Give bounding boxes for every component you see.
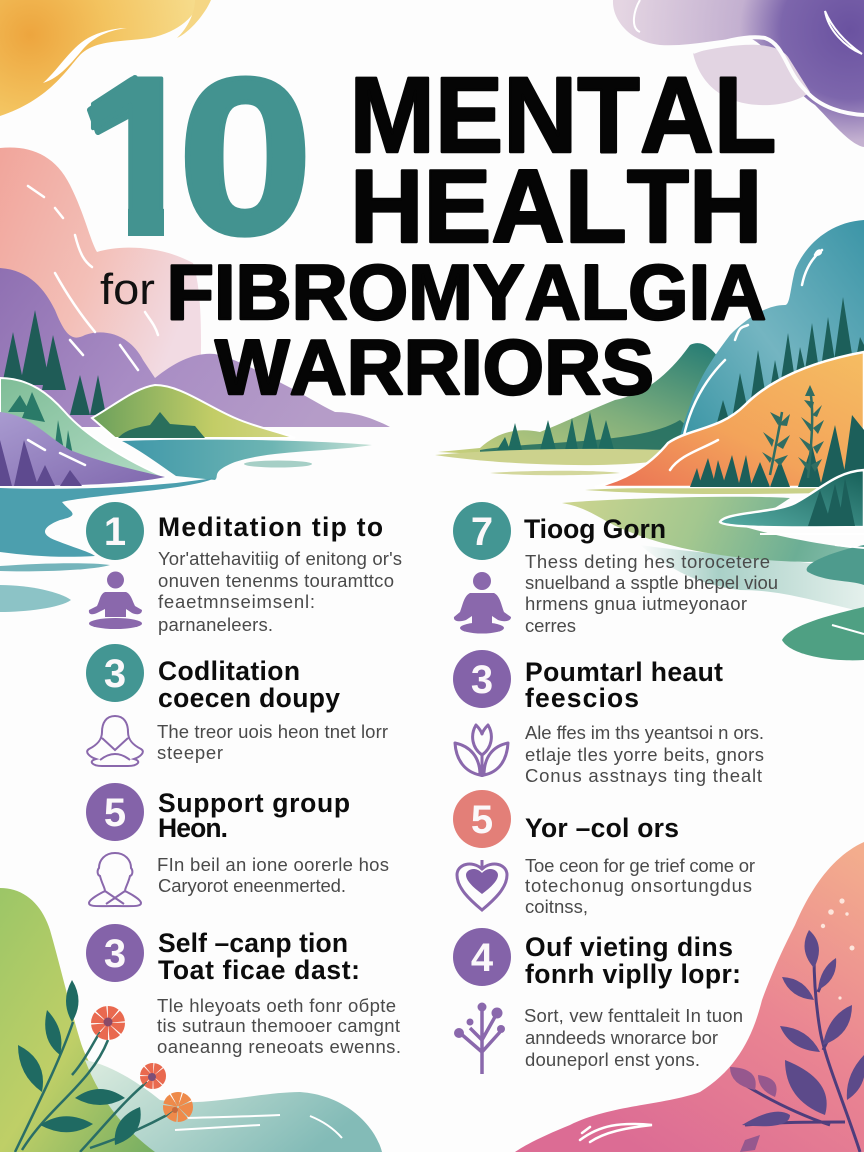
heading xyxy=(525,932,741,989)
lavender hill xyxy=(0,412,165,486)
body: steeper xyxy=(157,742,223,763)
back green hills xyxy=(438,343,720,455)
green water at right edge xyxy=(782,607,864,660)
number badge 1 xyxy=(86,502,144,560)
icon: leaf sprig xyxy=(455,725,508,777)
highlight strokes xyxy=(28,186,158,465)
number badge 5: 5 xyxy=(104,791,126,835)
body: snuelband a ssptle bhepel viou xyxy=(525,572,778,593)
number badge 7: 7 xyxy=(471,510,493,554)
big number 10: 0 xyxy=(178,33,313,281)
body: Tle hleyoats oeth fonr oбpte xyxy=(157,995,396,1016)
number badge 4 xyxy=(453,928,511,986)
tip: Meditation tip to xyxy=(86,502,402,635)
lake xyxy=(122,440,372,480)
body: Yor'attehavitiig of enitong or's xyxy=(158,548,402,569)
right landscape xyxy=(435,220,864,660)
heading: Tioog Gorn xyxy=(524,514,666,544)
number badge 3: 3 xyxy=(104,652,126,696)
icon: outlined meditating figure xyxy=(87,716,143,766)
number badge 3 xyxy=(453,650,511,708)
bottom-left green hill xyxy=(0,888,382,1152)
white water glints xyxy=(760,534,864,634)
river band right xyxy=(562,497,864,562)
icon: layered heart xyxy=(457,860,507,910)
top-right purple blob xyxy=(613,0,864,147)
icon: outlined head and shoulders figure xyxy=(89,853,141,906)
body: feaetmnseimsenl: xyxy=(158,591,315,612)
faded teal water band xyxy=(640,545,864,612)
number badge 5 xyxy=(453,790,511,848)
distant trees xyxy=(497,412,614,450)
top-left yellow blob xyxy=(0,0,211,116)
small teal hill xyxy=(720,470,864,527)
mountain highlights xyxy=(683,250,822,440)
number badge 3: 3 xyxy=(471,658,493,702)
left landscape xyxy=(0,147,390,612)
heading: Toat ficae dast: xyxy=(158,955,360,985)
teal mountain xyxy=(678,220,864,470)
body: etlaje tles yorre beits, gnors xyxy=(525,744,764,765)
number badge 1: 1 xyxy=(104,510,126,554)
body: coitnss, xyxy=(525,896,588,917)
yellow-green hill xyxy=(92,385,295,438)
body: Ale ffes im ths yeantsoi n ors. xyxy=(525,722,764,743)
body: douneporl enst yons. xyxy=(525,1049,700,1070)
body: Conus asstnays ting thealt xyxy=(525,765,762,786)
body: onuven tenenms touramttco xyxy=(158,570,394,591)
icon: solid meditating figure xyxy=(454,572,511,634)
heading: coecen doupy xyxy=(158,683,340,713)
tip: Codlitation coecen doupy xyxy=(86,644,388,766)
bottom-right pink blob xyxy=(515,842,864,1152)
heading: Ouf vieting dins xyxy=(525,932,733,962)
mint hill xyxy=(0,378,165,485)
heading: Meditation tip to xyxy=(158,512,383,542)
heading xyxy=(525,657,723,713)
tip: Ouf vieting dins xyxy=(453,928,743,1074)
bottom-right purple plant xyxy=(730,930,864,1152)
body: Caryorot eneenmerted. xyxy=(158,875,346,896)
body: oaneanng reneoats ewenns. xyxy=(157,1036,401,1057)
icon: branching tree xyxy=(454,1002,505,1074)
body xyxy=(525,722,764,786)
for: for xyxy=(100,264,155,314)
body: tis sutraun themooer camgnt xyxy=(157,1015,400,1036)
body xyxy=(157,721,388,763)
tree line on orange hill xyxy=(690,415,864,487)
body xyxy=(158,548,402,635)
body xyxy=(525,855,755,917)
WARRIORS: WARRIORS xyxy=(215,323,654,411)
heading: feescios xyxy=(525,683,639,713)
river left xyxy=(0,478,215,557)
body: totechonug onsortungdus xyxy=(525,875,752,896)
purple mountain range xyxy=(0,268,390,427)
body xyxy=(157,995,401,1057)
MENTAL: MENTAL xyxy=(350,56,776,176)
orange hill xyxy=(595,352,864,487)
heading: fonrh viplly lopr: xyxy=(525,959,741,989)
fern plants xyxy=(770,390,812,478)
tip: Poumtarl heaut feescios xyxy=(453,650,764,786)
heading: Heon. xyxy=(158,813,228,843)
body xyxy=(525,551,778,636)
bottom-left plant with flowers xyxy=(15,980,186,1152)
heading xyxy=(158,928,360,985)
tip: Support group Heon. xyxy=(86,783,389,906)
heading: Codlitation xyxy=(158,656,300,686)
pink mountain xyxy=(0,147,201,400)
HEALTH: HEALTH xyxy=(350,148,762,264)
number badge 5 xyxy=(86,783,144,841)
number badge 3 xyxy=(86,644,144,702)
body: FIn beil an ione oorerle hos xyxy=(157,854,389,875)
heading xyxy=(158,656,340,713)
upper river stripes xyxy=(435,449,670,465)
tip: Tioog Gorn xyxy=(453,502,778,636)
body xyxy=(157,854,389,896)
tip: Self-canption xyxy=(86,924,401,1057)
body: parnaneleers. xyxy=(158,614,273,635)
big number 10: 1 xyxy=(78,29,203,282)
body: Toe ceon for ge trief come or xyxy=(525,855,755,876)
dark trees behind orange hill xyxy=(715,297,864,430)
heading: Support group xyxy=(158,788,350,818)
heading: Poumtarl heaut xyxy=(525,657,723,687)
tip: Yor-col ors xyxy=(453,790,755,917)
body: hrmens gnua iutmeyonaor xyxy=(525,593,747,614)
number badge 4: 4 xyxy=(471,936,494,980)
heading: Yor –col ors xyxy=(525,813,679,843)
body: Thess deting hes torocetere xyxy=(525,551,770,572)
big number 10 xyxy=(87,75,306,238)
dark trees on the left xyxy=(2,310,106,415)
body xyxy=(524,1005,743,1070)
number badge 3: 3 xyxy=(104,932,126,976)
body: The treor uois heon tnet lorr xyxy=(157,721,388,742)
FIBROMYALGIA: FIBROMYALGIA xyxy=(166,250,766,336)
heading xyxy=(158,788,350,843)
body: cerres xyxy=(525,615,576,636)
number badge 7 xyxy=(453,502,511,560)
heading: Self –canp tion xyxy=(158,928,348,958)
number badge 3 xyxy=(86,924,144,982)
title xyxy=(87,75,774,396)
icon: solid meditating figure xyxy=(89,572,142,629)
body: Sort, vew fenttaleit In tuon xyxy=(524,1005,743,1026)
number badge 5: 5 xyxy=(471,798,493,842)
body: anndeeds wnorarce bor xyxy=(525,1027,718,1048)
